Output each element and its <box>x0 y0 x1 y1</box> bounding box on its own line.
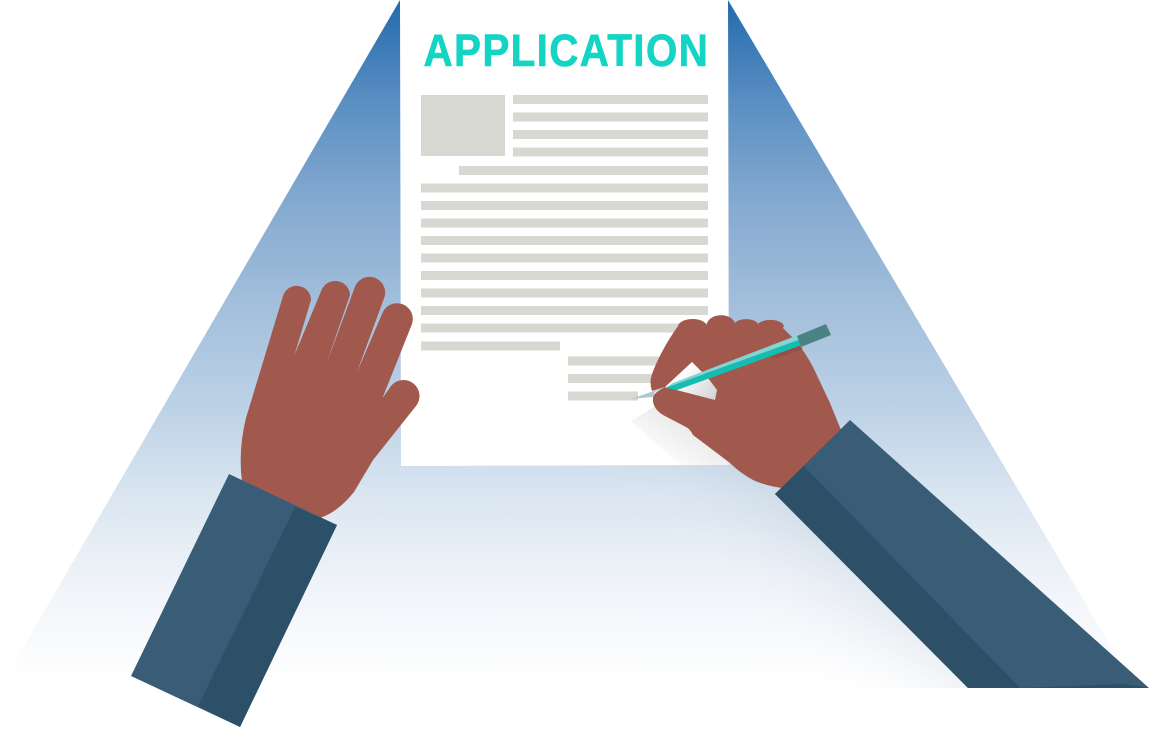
right hand <box>631 315 841 488</box>
left hand <box>241 277 419 518</box>
shadow of right arm <box>560 440 968 688</box>
title: APPLICATION <box>424 26 708 77</box>
application paper <box>400 0 729 466</box>
left sleeve <box>131 474 337 727</box>
right sleeve <box>775 420 1149 688</box>
shadow of right hand on paper <box>631 400 729 465</box>
pen <box>631 324 831 399</box>
text lines <box>421 95 708 400</box>
gap between thumb and finger <box>665 362 717 400</box>
photo placeholder <box>421 95 505 156</box>
